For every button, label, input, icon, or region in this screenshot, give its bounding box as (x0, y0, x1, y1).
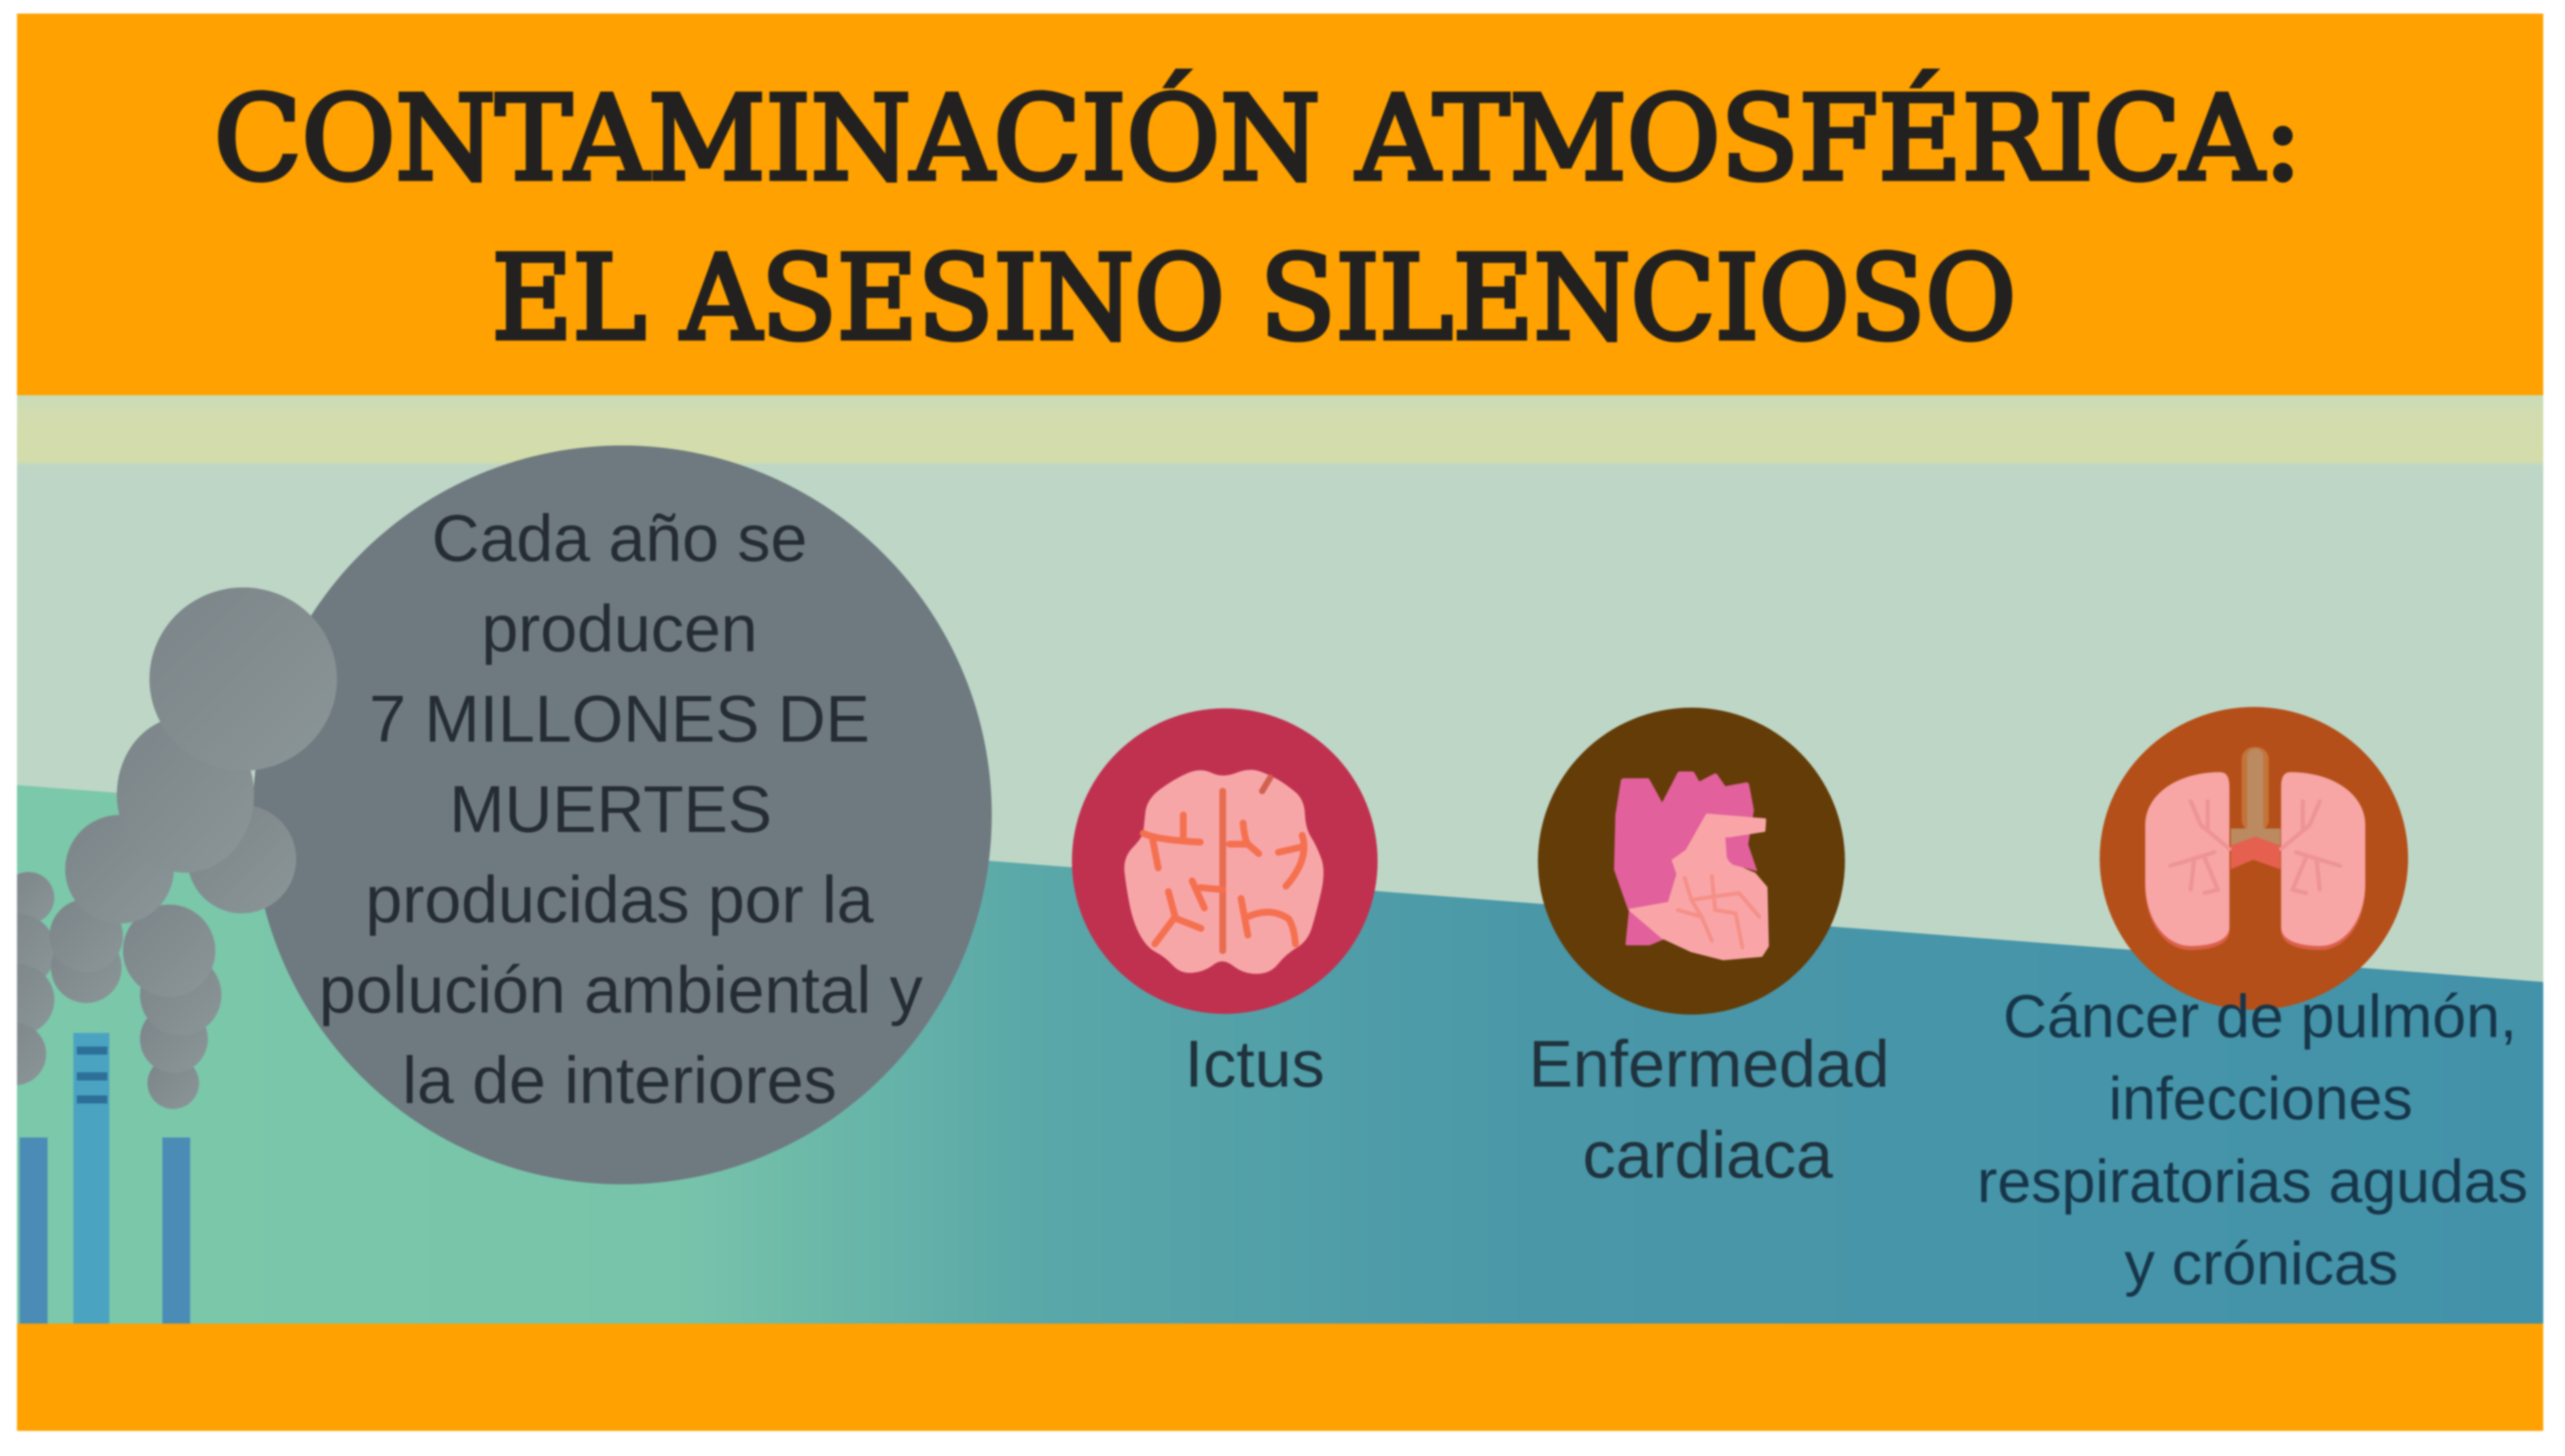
main statistic text: la de interiores (402, 1043, 837, 1117)
title: CONTAMINACIÓN ATMOSFÉRICA: (214, 71, 2302, 206)
label: Enfermedad cardiaca (1528, 1027, 1890, 1192)
label: lung cancer and respiratory infections: respiratorias agudas (1977, 1147, 2528, 1215)
main statistic text: Cada año se (432, 501, 807, 575)
icon: heart (1538, 708, 1845, 1015)
smoke clouds (0, 587, 337, 1109)
label: lung cancer and respiratory infections (1977, 982, 2528, 1297)
label: lung cancer and respiratory infections: Cáncer de pulmón, (2003, 982, 2517, 1050)
label: lung cancer and respiratory infections: infecciones (2109, 1064, 2413, 1132)
label: lung cancer and respiratory infections: y crónicas (2125, 1229, 2398, 1297)
main statistic text: polución ambiental y (319, 953, 923, 1027)
label: Ictus: Ictus (1185, 1027, 1325, 1101)
title: EL ASESINO SILENCIOSO (492, 231, 2016, 366)
label: Enfermedad cardiaca: cardiaca (1583, 1118, 1833, 1192)
big grey smoke circle (253, 445, 992, 1184)
main statistic text (319, 501, 923, 1117)
main statistic text: MUERTES (450, 772, 772, 846)
icon: brain (1072, 708, 1378, 1014)
main statistic text: 7 MILLONES DE (370, 682, 869, 756)
background panel (17, 395, 2543, 1324)
label: Enfermedad cardiaca: Enfermedad (1528, 1027, 1890, 1101)
main statistic text: producidas por la (365, 862, 874, 936)
factory chimneys (20, 1033, 190, 1324)
icon: lungs (2100, 707, 2408, 1010)
main statistic text: producen (482, 592, 757, 666)
footer banner (17, 1324, 2543, 1431)
title (214, 71, 2302, 366)
header banner (17, 14, 2543, 395)
